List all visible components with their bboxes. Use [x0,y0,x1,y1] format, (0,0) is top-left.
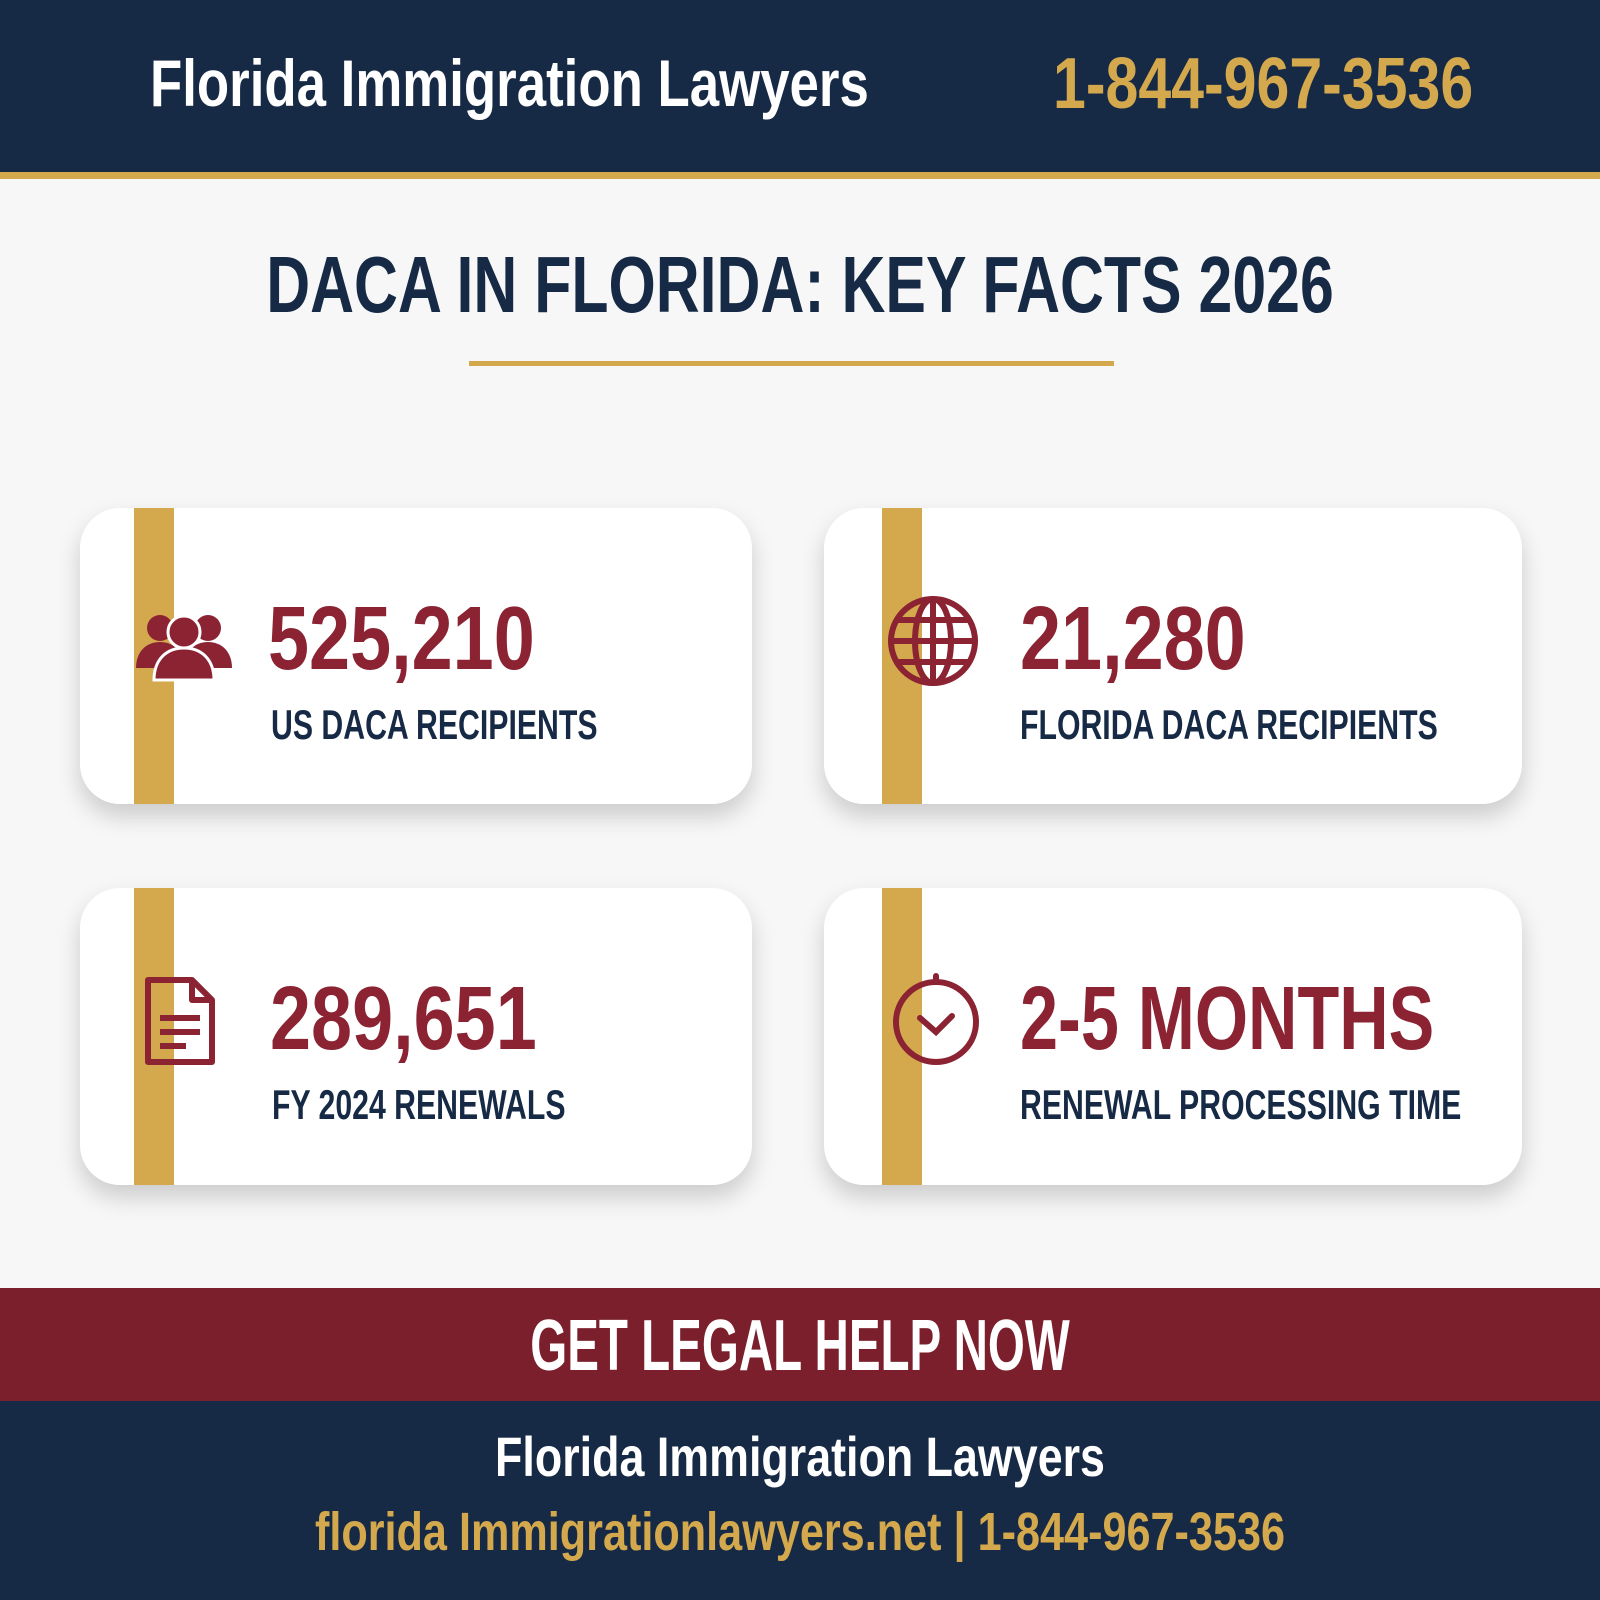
title: DACA IN FLORIDA: KEY FACTS 2026 [266,240,1334,329]
card: US DACA recipients [80,508,752,804]
label: RENEWAL PROCESSING TIME [1020,1081,1461,1128]
label: US DACA RECIPIENTS [271,701,598,748]
number: 289,651 [270,969,537,1069]
icon: globe [888,596,978,686]
number: 525,210 [268,589,535,689]
CTA text: GET LEGAL HELP NOW [530,1306,1070,1386]
card: FY 2024 renewals [80,888,752,1185]
icon: people [136,615,232,682]
number: 2-5 MONTHS [1020,969,1434,1069]
title underline [469,361,1114,366]
number: 21,280 [1020,589,1246,689]
header bar [0,0,1600,172]
label: FY 2024 RENEWALS [272,1081,566,1128]
gold header stripe [0,172,1600,179]
footer firm name: Florida Immigration Lawyers [495,1425,1105,1488]
header phone: 1-844-967-3536 [1053,44,1473,124]
header firm name: Florida Immigration Lawyers [150,46,869,120]
footer [0,1401,1600,1600]
footer contact: florida Immigrationlawyers.net | 1-844-967-3536 [315,1502,1285,1562]
label: FLORIDA DACA RECIPIENTS [1020,701,1438,748]
card: renewal processing time [824,888,1522,1185]
card: Florida DACA recipients [824,508,1522,804]
icon: document [145,977,215,1065]
icon: clock [893,973,979,1065]
CTA band [0,1288,1600,1401]
